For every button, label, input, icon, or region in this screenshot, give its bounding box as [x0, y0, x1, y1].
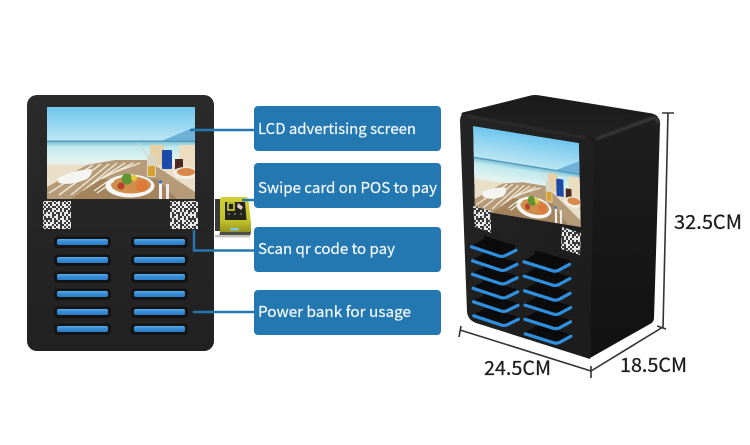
QR code left	[473, 206, 491, 233]
dimension: height	[657, 113, 742, 329]
top face	[463, 96, 656, 140]
connector: power bank line	[193, 311, 254, 313]
QR code left	[43, 201, 71, 229]
right slots	[524, 252, 571, 343]
panel: front view of station	[27, 95, 214, 351]
edge highlight	[468, 116, 658, 139]
side face	[590, 117, 660, 358]
label: scan QR code: Scan qr code to pay	[258, 238, 395, 259]
connector: QR code line	[194, 230, 254, 250]
label: LCD advertising screen	[254, 106, 441, 151]
connector: LCD line	[190, 129, 254, 131]
front face	[460, 114, 594, 359]
QR code right	[170, 201, 198, 229]
power bank slots	[54, 236, 188, 335]
panel: 3D view of station	[460, 96, 660, 359]
label: power bank for usage: Power bank for usage	[258, 301, 411, 322]
label: LCD advertising screen: LCD advertising screen	[258, 118, 416, 139]
station body	[27, 95, 214, 351]
label: swipe card on POS	[254, 163, 441, 208]
screen	[473, 126, 582, 227]
label: scan QR code	[254, 227, 441, 272]
dimension: depth: 18.5CM	[620, 349, 687, 378]
icon: POS card terminal	[215, 197, 251, 238]
left slots	[472, 237, 518, 325]
dimension: width	[459, 326, 591, 381]
connector: POS line	[242, 199, 254, 201]
label: power bank for usage	[254, 290, 441, 335]
QR code right	[561, 227, 581, 255]
LCD screen photo	[47, 107, 197, 199]
dimension: width: 24.5CM	[484, 352, 551, 381]
dimension: depth	[591, 327, 687, 378]
label: swipe card on POS: Swipe card on POS to pay	[258, 177, 437, 198]
dimension: height: 32.5CM	[674, 206, 742, 235]
